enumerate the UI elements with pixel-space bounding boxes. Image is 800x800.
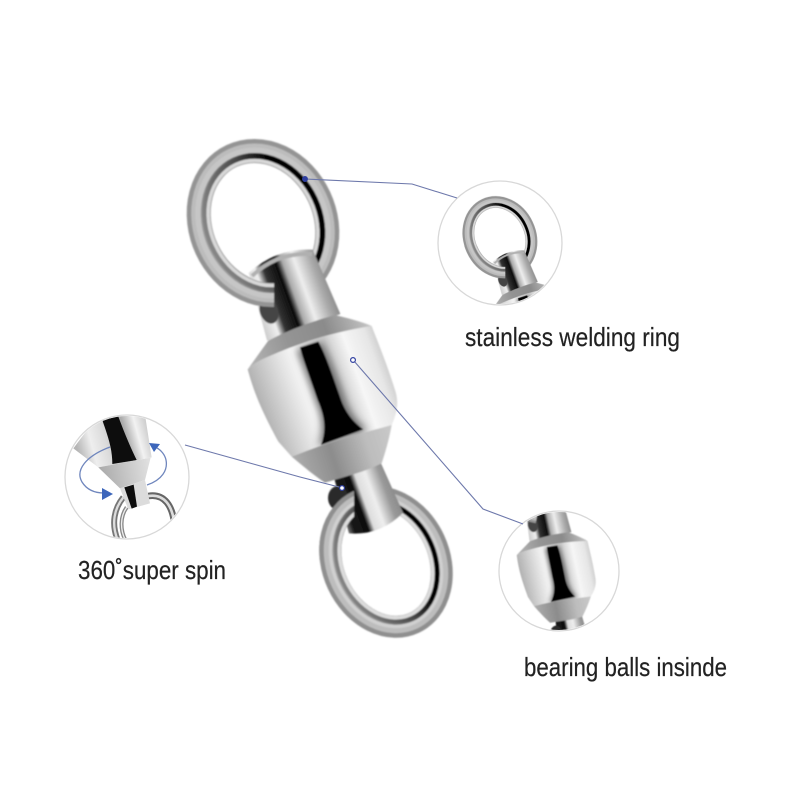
detail image: bearing body close-up xyxy=(516,512,596,630)
panel: bearing balls inside xyxy=(498,510,726,682)
leader line: ring xyxy=(303,177,457,198)
detail circle: bearing xyxy=(499,511,619,631)
leader line: bearing xyxy=(351,358,523,524)
label: bearing balls insinde: bearing balls insinde xyxy=(524,652,727,682)
label: stainless welding ring: stainless welding ring xyxy=(465,322,680,352)
panel: stainless welding ring xyxy=(438,181,680,446)
panel: 360 super spin xyxy=(65,415,226,585)
detail circle: spin xyxy=(65,415,189,539)
leader line: spin xyxy=(185,445,344,490)
infographic: ball bearing swivel xyxy=(64,138,726,682)
icon: rotation arrows xyxy=(80,443,166,500)
detail circle: ring xyxy=(438,181,562,305)
detail image: ring close-up xyxy=(462,196,544,304)
main product: ball bearing swivel xyxy=(170,124,466,649)
label: 360 super spin: 360˚super spin xyxy=(78,555,226,585)
detail image: swivel joint close-up xyxy=(73,415,174,541)
